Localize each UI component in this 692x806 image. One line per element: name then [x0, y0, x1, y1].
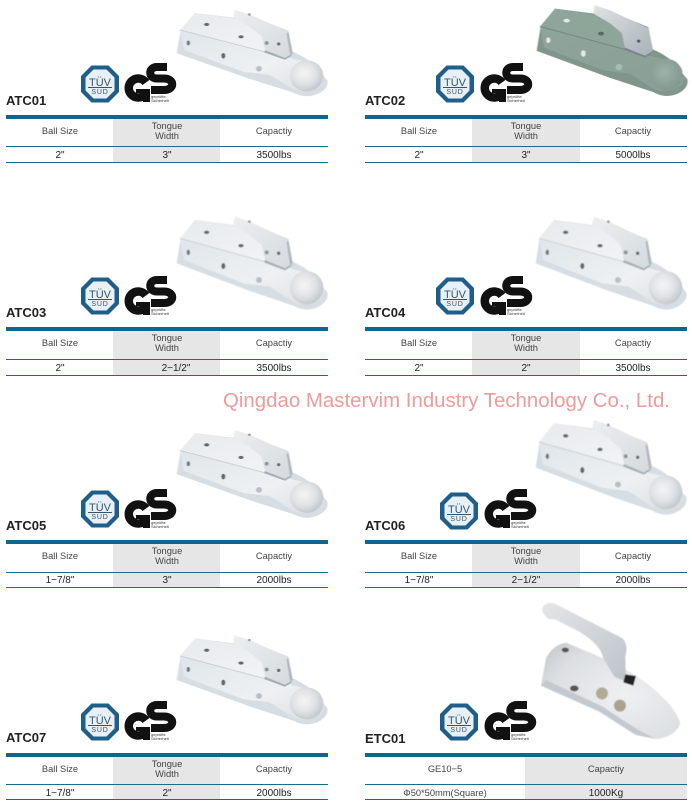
spec table: Tongue: [152, 333, 182, 343]
spec table: Width: [155, 131, 179, 141]
spec table: Ball Size: [42, 338, 78, 348]
product photo: ATC01 coupler: [177, 10, 328, 96]
certification logo: GS: [489, 493, 532, 529]
spec table: Capactiy: [615, 551, 651, 561]
product photo: ATC03 coupler: [177, 217, 328, 310]
certification logo: GS: geprüfte: [151, 520, 166, 525]
spec table: 2−1/2": [512, 575, 541, 586]
spec table: GE10−5: [428, 764, 462, 774]
certification logo: GS: [489, 705, 532, 741]
panel: ATC01: [6, 10, 328, 163]
spec table: Capactiy: [256, 764, 292, 774]
certification logo: GS: geprüfte: [151, 307, 166, 312]
heading: ATC02: [365, 93, 405, 108]
certification logo: GS: Sicherheit: [151, 311, 170, 316]
spec table: Tongue: [152, 121, 182, 131]
heading: ATC06: [365, 518, 405, 533]
certification logo: TUV SUD: TÜV: [89, 289, 112, 301]
certification logo: TUV SUD: SÜD: [91, 300, 109, 308]
certification logo: TUV SUD: TÜV: [89, 502, 112, 514]
product photo: ATC06 coupler: [536, 420, 687, 515]
certification logo: GS: [485, 280, 528, 316]
spec table: 3": [162, 150, 172, 161]
certification logo: TUV SUD: SÜD: [446, 300, 464, 308]
certification logo: GS: Sicherheit: [511, 524, 530, 529]
spec table: Ball Size: [42, 126, 78, 136]
spec table: Tongue: [511, 546, 541, 556]
panel: ATC05: [6, 430, 328, 588]
heading: ATC07: [6, 730, 46, 745]
spec table: [365, 327, 687, 376]
spec table: [6, 115, 328, 163]
spec table: [365, 115, 687, 163]
spec table: 3500lbs: [615, 363, 651, 374]
heading: ATC01: [6, 93, 46, 108]
spec table: Ball Size: [401, 551, 437, 561]
certification logo: GS: geprüfte: [151, 732, 166, 737]
product photo: ATC02 coupler: [537, 5, 688, 96]
spec table: Capactiy: [256, 338, 292, 348]
certification logo: GS: geprüfte: [511, 520, 526, 525]
spec table: 2": [521, 363, 531, 374]
watermark: Qingdao Mastervim Industry Technology Co., Ltd.: [223, 390, 670, 412]
certification logo: TUV SUD: SÜD: [450, 726, 468, 734]
certification logo: TUV SUD: TÜV: [444, 289, 467, 301]
certification logo: GS: Sicherheit: [151, 98, 170, 103]
certification logo: GS: geprüfte: [511, 732, 526, 737]
product photo: ETC01 coupler: [541, 603, 680, 739]
product photo: ATC05 coupler: [177, 430, 328, 518]
spec table: [6, 540, 328, 588]
certification logo: GS: Sicherheit: [511, 736, 530, 741]
spec table: Width: [155, 556, 179, 566]
spec table: Capactiy: [256, 126, 292, 136]
spec table: Width: [155, 343, 179, 353]
spec table: 2": [55, 150, 65, 161]
certification logo: TUV SUD: [81, 66, 119, 102]
panel: ATC07: [6, 635, 328, 800]
spec table: 3": [162, 575, 172, 586]
spec table: 1−7/8": [46, 575, 75, 586]
spec table: Width: [514, 343, 538, 353]
spec table: 2": [55, 363, 65, 374]
spec table: 5000lbs: [615, 150, 651, 161]
product photo: ATC04 coupler: [536, 217, 687, 310]
spec table: Tongue: [511, 333, 541, 343]
panel: ETC01: [365, 603, 687, 800]
spec table: 2": [162, 788, 172, 799]
certification logo: TUV SUD: [440, 492, 478, 530]
spec table: Capactiy: [615, 338, 651, 348]
spec table: Ball Size: [401, 126, 437, 136]
spec table: Width: [155, 769, 179, 779]
spec table: [6, 753, 328, 800]
spec table: 3500lbs: [256, 363, 292, 374]
spec table: Capactiy: [256, 551, 292, 561]
product photo: ATC07 coupler: [177, 635, 328, 724]
heading: ATC04: [365, 305, 406, 320]
certification logo: TUV SUD: SÜD: [91, 726, 109, 734]
certification logo: GS: Sicherheit: [151, 736, 170, 741]
certification logo: GS: [129, 705, 172, 741]
certification logo: TUV SUD: [81, 704, 119, 740]
certification logo: GS: [129, 67, 172, 103]
spec table: Capactiy: [588, 764, 624, 774]
heading: ATC05: [6, 518, 46, 533]
spec table: Tongue: [152, 546, 182, 556]
certification logo: GS: [485, 67, 528, 103]
certification logo: TUV SUD: TÜV: [444, 77, 467, 89]
certification logo: TUV SUD: SÜD: [91, 513, 109, 521]
spec table: Tongue: [511, 121, 541, 131]
certification logo: TUV SUD: TÜV: [89, 77, 112, 89]
spec table: [365, 540, 687, 588]
spec table: [365, 753, 687, 800]
certification logo: TUV SUD: [440, 704, 478, 740]
certification logo: GS: Sicherheit: [151, 524, 170, 529]
spec table: Φ50*50mm(Square): [403, 788, 487, 798]
certification logo: GS: [129, 493, 172, 529]
certification logo: GS: geprüfte: [507, 94, 522, 99]
panel: ATC03: [6, 217, 328, 376]
certification logo: TUV SUD: [81, 278, 119, 314]
certification logo: TUV SUD: [436, 66, 474, 102]
certification logo: TUV SUD: [436, 278, 474, 314]
certification logo: GS: Sicherheit: [507, 98, 526, 103]
certification logo: GS: geprüfte: [507, 307, 522, 312]
spec table: Ball Size: [42, 551, 78, 561]
certification logo: GS: geprüfte: [151, 94, 166, 99]
spec table: 3500lbs: [256, 150, 292, 161]
spec table: Width: [514, 556, 538, 566]
spec table: 1000Kg: [589, 788, 623, 799]
spec table: 2": [414, 363, 424, 374]
spec table: 2−1/2": [162, 363, 191, 374]
panel: ATC06: [365, 420, 687, 588]
spec table: 2000lbs: [256, 575, 292, 586]
spec table: Ball Size: [42, 764, 78, 774]
panel: ATC04: [365, 217, 687, 376]
spec table: [6, 327, 328, 376]
heading: ETC01: [365, 731, 405, 746]
certification logo: TUV SUD: [81, 490, 119, 528]
spec table: 2000lbs: [256, 788, 292, 799]
certification logo: GS: [129, 280, 172, 316]
certification logo: TUV SUD: TÜV: [448, 504, 471, 516]
spec table: 3": [521, 150, 531, 161]
certification logo: TUV SUD: SÜD: [446, 88, 464, 96]
certification logo: TUV SUD: SÜD: [450, 515, 468, 523]
certification logo: GS: Sicherheit: [507, 311, 526, 316]
certification logo: TUV SUD: TÜV: [89, 715, 112, 727]
spec table: 1−7/8": [46, 788, 75, 799]
spec table: Tongue: [152, 759, 182, 769]
panel: ATC02: [365, 5, 688, 163]
spec table: Capactiy: [615, 126, 651, 136]
spec table: Width: [514, 131, 538, 141]
certification logo: TUV SUD: SÜD: [91, 88, 109, 96]
spec table: 1−7/8": [405, 575, 434, 586]
certification logo: TUV SUD: TÜV: [448, 715, 471, 727]
spec table: 2": [414, 150, 424, 161]
spec table: 2000lbs: [615, 575, 651, 586]
heading: ATC03: [6, 305, 46, 320]
spec table: Ball Size: [401, 338, 437, 348]
